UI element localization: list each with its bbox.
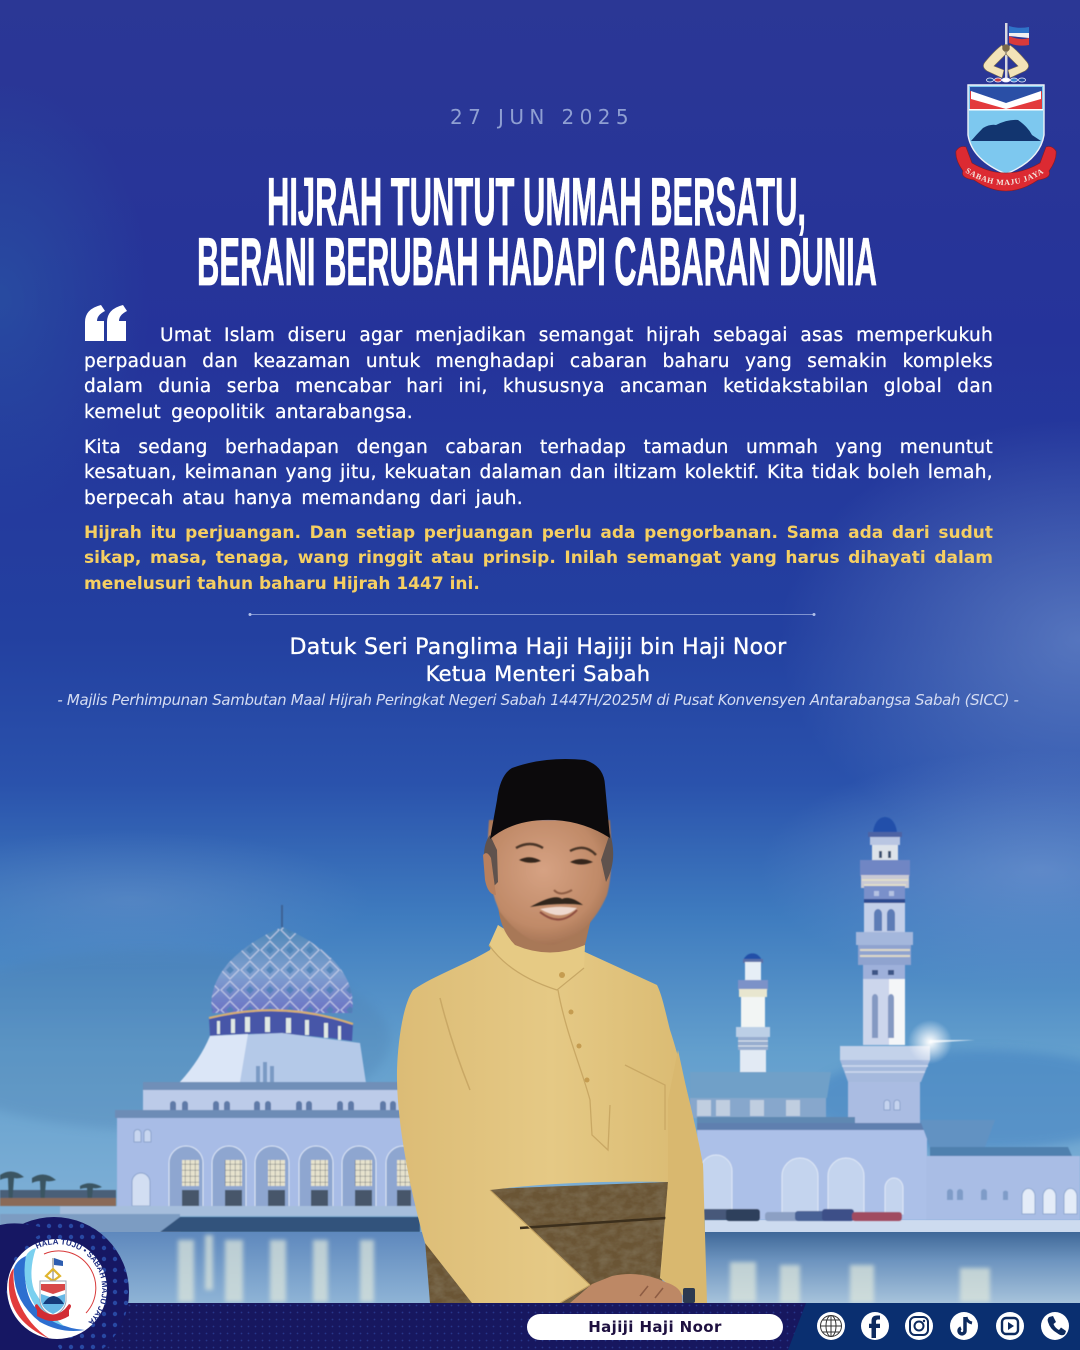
- paragraph three highlighted: menelusuri tahun baharu Hijrah 1447 ini.: [84, 574, 480, 594]
- paragraph two: kesatuan, keimanan yang jitu, kekuatan dalaman dan iltizam kolektif. Kita tidak boleh lemah,: [84, 462, 993, 483]
- speaker title: Ketua Menteri Sabah: [426, 662, 650, 686]
- crest: Sabah coat of arms: [956, 23, 1056, 192]
- name pill: Hajiji Haji Noor: [588, 1318, 722, 1336]
- paragraph one: [84, 325, 993, 423]
- speaker name: Datuk Seri Panglima Haji Hajiji bin Haji Noor: [289, 635, 787, 660]
- icon: opening quote mark: [85, 305, 127, 341]
- large minaret: [840, 817, 930, 1124]
- paragraph one: perpaduan dan keazaman untuk menghadapi cabaran baharu yang semakin kompleks: [84, 351, 993, 372]
- crest shield: [968, 85, 1044, 174]
- paragraph one: Umat Islam diseru agar menjadikan semangat hijrah sebagai asas memperkukuh: [160, 325, 993, 346]
- paragraph two: Kita sedang berhadapan dengan cabaran terhadap tamadun ummah yang menuntut: [84, 437, 993, 458]
- paragraph three highlighted: [84, 523, 993, 594]
- mosque left section: [0, 905, 420, 1234]
- facial features: [516, 844, 596, 920]
- round emblem logo: [0, 1217, 129, 1350]
- divider: [248, 613, 816, 616]
- sampin: [425, 1182, 668, 1303]
- paragraph two: [84, 437, 993, 509]
- person portrait: [397, 759, 707, 1303]
- crest wreath: [986, 78, 1026, 82]
- crest ribbon: SABAH MAJU JAYA: [966, 168, 1044, 186]
- icon: mosque dome: [180, 905, 366, 1083]
- far palm trees: [0, 1171, 116, 1206]
- sampin belt fold: [520, 1218, 666, 1228]
- right building: [690, 1072, 1080, 1221]
- icon: facebook: [861, 1312, 889, 1340]
- neck and face: [498, 906, 590, 952]
- paragraph two: berpecah atau hanya memandang dari jauh.: [84, 488, 523, 509]
- songkok cap: [490, 759, 610, 839]
- icon: youtube: [996, 1312, 1024, 1340]
- logo ring text: HALA TUJU • SABAH MAJU JAYA: [35, 1238, 108, 1324]
- paragraph three highlighted: Hijrah itu perjuangan. Dan setiap perjuangan perlu ada pengorbanan. Sama ada dari sudut: [84, 523, 993, 543]
- name pill: [527, 1314, 783, 1340]
- date: 27 JUN 2025: [450, 105, 634, 129]
- icon: tiktok: [950, 1312, 978, 1340]
- parked cars: [702, 1209, 902, 1221]
- water reflection: [0, 1220, 1080, 1304]
- collar: [489, 925, 585, 952]
- logo small crest: [35, 1258, 71, 1321]
- paragraph three highlighted: sikap, masa, tenaga, wang ringgit atau prinsip. Inilah semangat yang harus dihayati dalam: [84, 548, 993, 568]
- icon: instagram: [905, 1312, 933, 1340]
- hands and watch: [570, 1274, 682, 1303]
- social icons: [817, 1312, 1069, 1340]
- headline: [197, 164, 877, 300]
- lens flare: [908, 1020, 975, 1064]
- paragraph one: kemelut geopolitik antarabangsa.: [84, 402, 413, 423]
- icon: website: [817, 1312, 845, 1340]
- small minaret: [736, 953, 770, 1072]
- event source line: - Majlis Perhimpunan Sambutan Maal Hijrah Peringkat Negeri Sabah 1447H/2025M di Pusat Konvensyen Antarabangsa Sabah (SICC) -: [57, 691, 1019, 709]
- paragraph one: dalam dunia serba mencabar hari ini, khususnya ancaman ketidakstabilan global dan: [84, 376, 993, 397]
- front placket and pocket: [558, 990, 665, 1150]
- logo dark dotted disc: [0, 1217, 129, 1350]
- crest flag: [1005, 23, 1029, 78]
- icon: phone: [1041, 1312, 1069, 1340]
- crest ribbon: [956, 146, 1056, 192]
- mosque main building left: [0, 1082, 420, 1234]
- mosque right section: [690, 817, 1080, 1221]
- shirt: [397, 925, 706, 1303]
- bottom bar: [0, 1303, 1080, 1350]
- crest arms: [983, 44, 1029, 78]
